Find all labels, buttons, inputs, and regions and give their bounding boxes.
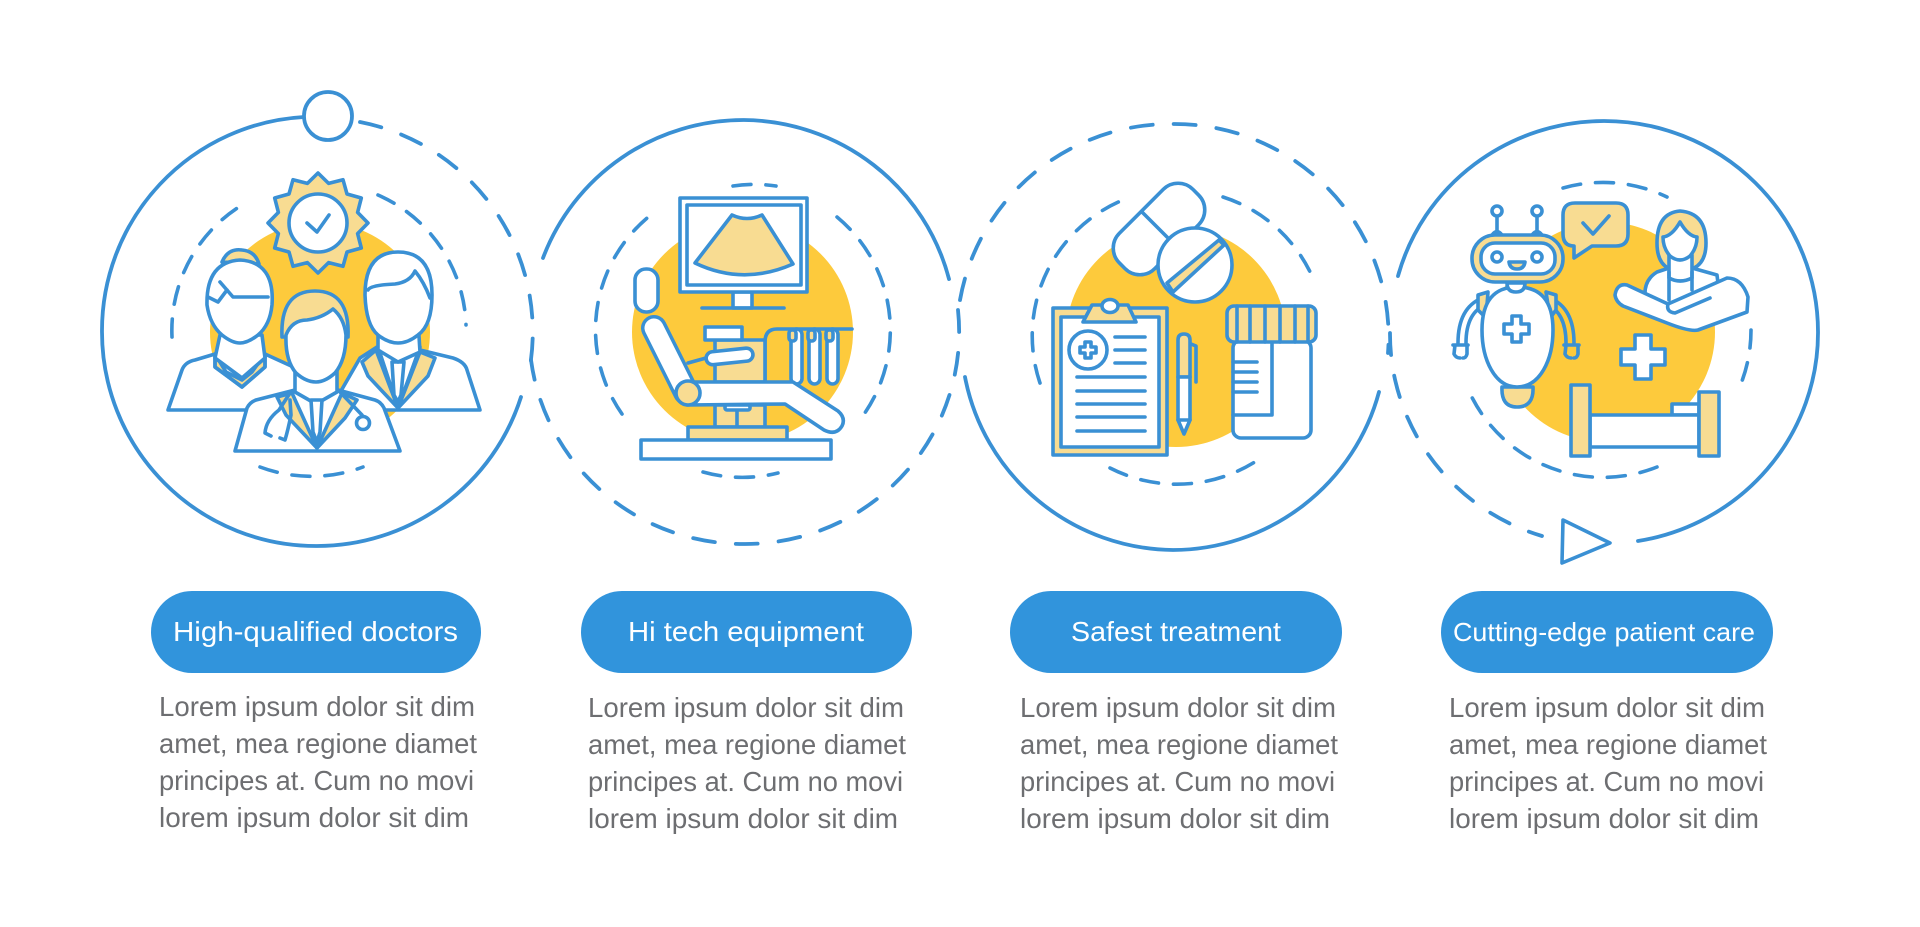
outer ring 1 xyxy=(102,92,533,546)
text block 1: amet, mea regione diamet xyxy=(159,728,477,759)
panel: safest treatment xyxy=(960,124,1389,550)
text block 4: amet, mea regione diamet xyxy=(1449,729,1767,760)
text block 2: lorem ipsum dolor sit dim xyxy=(588,803,898,834)
icon: quality badge xyxy=(268,173,368,273)
outer ring 4 xyxy=(1390,121,1818,541)
icon: pills xyxy=(1105,175,1232,302)
text block 3: amet, mea regione diamet xyxy=(1020,729,1338,760)
panel: hi tech equipment xyxy=(531,120,959,544)
inner dashed ring 2 xyxy=(596,184,890,477)
icon: medicine jar xyxy=(1227,306,1316,438)
icon: medical cross xyxy=(1621,335,1665,379)
icon: instrument tubes xyxy=(765,329,852,384)
text block 4 xyxy=(1449,692,1767,834)
yellow circle 4 xyxy=(1495,222,1715,442)
icon: main doctor with stethoscope xyxy=(235,291,400,451)
arrow head xyxy=(1562,520,1610,563)
text block 4: lorem ipsum dolor sit dim xyxy=(1449,803,1759,834)
text block 2: amet, mea regione diamet xyxy=(588,729,906,760)
label pill: safest treatment: Safest treatment xyxy=(1071,616,1281,647)
text block 2: Lorem ipsum dolor sit dim xyxy=(588,692,904,723)
panel: cutting-edge patient care xyxy=(1390,121,1818,563)
icon: ultrasound monitor xyxy=(680,198,807,308)
icon: pen xyxy=(1178,334,1196,434)
text block 1: Lorem ipsum dolor sit dim xyxy=(159,691,475,722)
label pill: cutting-edge patient care xyxy=(1441,591,1773,673)
icon: nurse with caring hand xyxy=(1615,211,1748,330)
label pill: high-qualified doctors: High-qualified doctors xyxy=(173,616,458,647)
icon: medical clipboard xyxy=(1053,300,1167,455)
yellow circle 1 xyxy=(210,222,430,442)
label pill: cutting-edge patient care: Cutting-edge patient care xyxy=(1453,617,1755,647)
text block 3: Lorem ipsum dolor sit dim xyxy=(1020,692,1336,723)
text block 2 xyxy=(588,692,906,834)
icon: male doctor xyxy=(330,252,480,410)
text block 1: principes at. Cum no movi xyxy=(159,765,474,796)
text block 4: principes at. Cum no movi xyxy=(1449,766,1764,797)
label pill: high-qualified doctors xyxy=(151,591,481,673)
text block 3: principes at. Cum no movi xyxy=(1020,766,1335,797)
inner dashed ring 4 xyxy=(1468,182,1751,477)
outer ring 3 xyxy=(960,124,1389,550)
label pill: hi tech equipment: Hi tech equipment xyxy=(628,616,864,647)
icon: female doctor xyxy=(168,250,300,410)
icon: speech bubble with check xyxy=(1563,203,1628,258)
inner dashed ring 1 xyxy=(172,195,466,476)
icon: dental chair xyxy=(635,269,843,459)
yellow circle 3 xyxy=(1066,227,1286,447)
label pill: hi tech equipment xyxy=(581,591,912,673)
panel: high-qualified doctors xyxy=(102,92,533,546)
text block 4: Lorem ipsum dolor sit dim xyxy=(1449,692,1765,723)
text block 1: lorem ipsum dolor sit dim xyxy=(159,802,469,833)
inner dashed ring 3 xyxy=(1032,197,1315,484)
text block 3: lorem ipsum dolor sit dim xyxy=(1020,803,1330,834)
text block 3 xyxy=(1020,692,1338,834)
outer ring 2 xyxy=(531,120,959,544)
icon: robot xyxy=(1453,206,1579,407)
icon: hospital bed xyxy=(1571,385,1719,456)
yellow circle 2 xyxy=(632,222,853,442)
text block 2: principes at. Cum no movi xyxy=(588,766,903,797)
text block 1 xyxy=(159,691,477,833)
label pill: safest treatment xyxy=(1010,591,1342,673)
